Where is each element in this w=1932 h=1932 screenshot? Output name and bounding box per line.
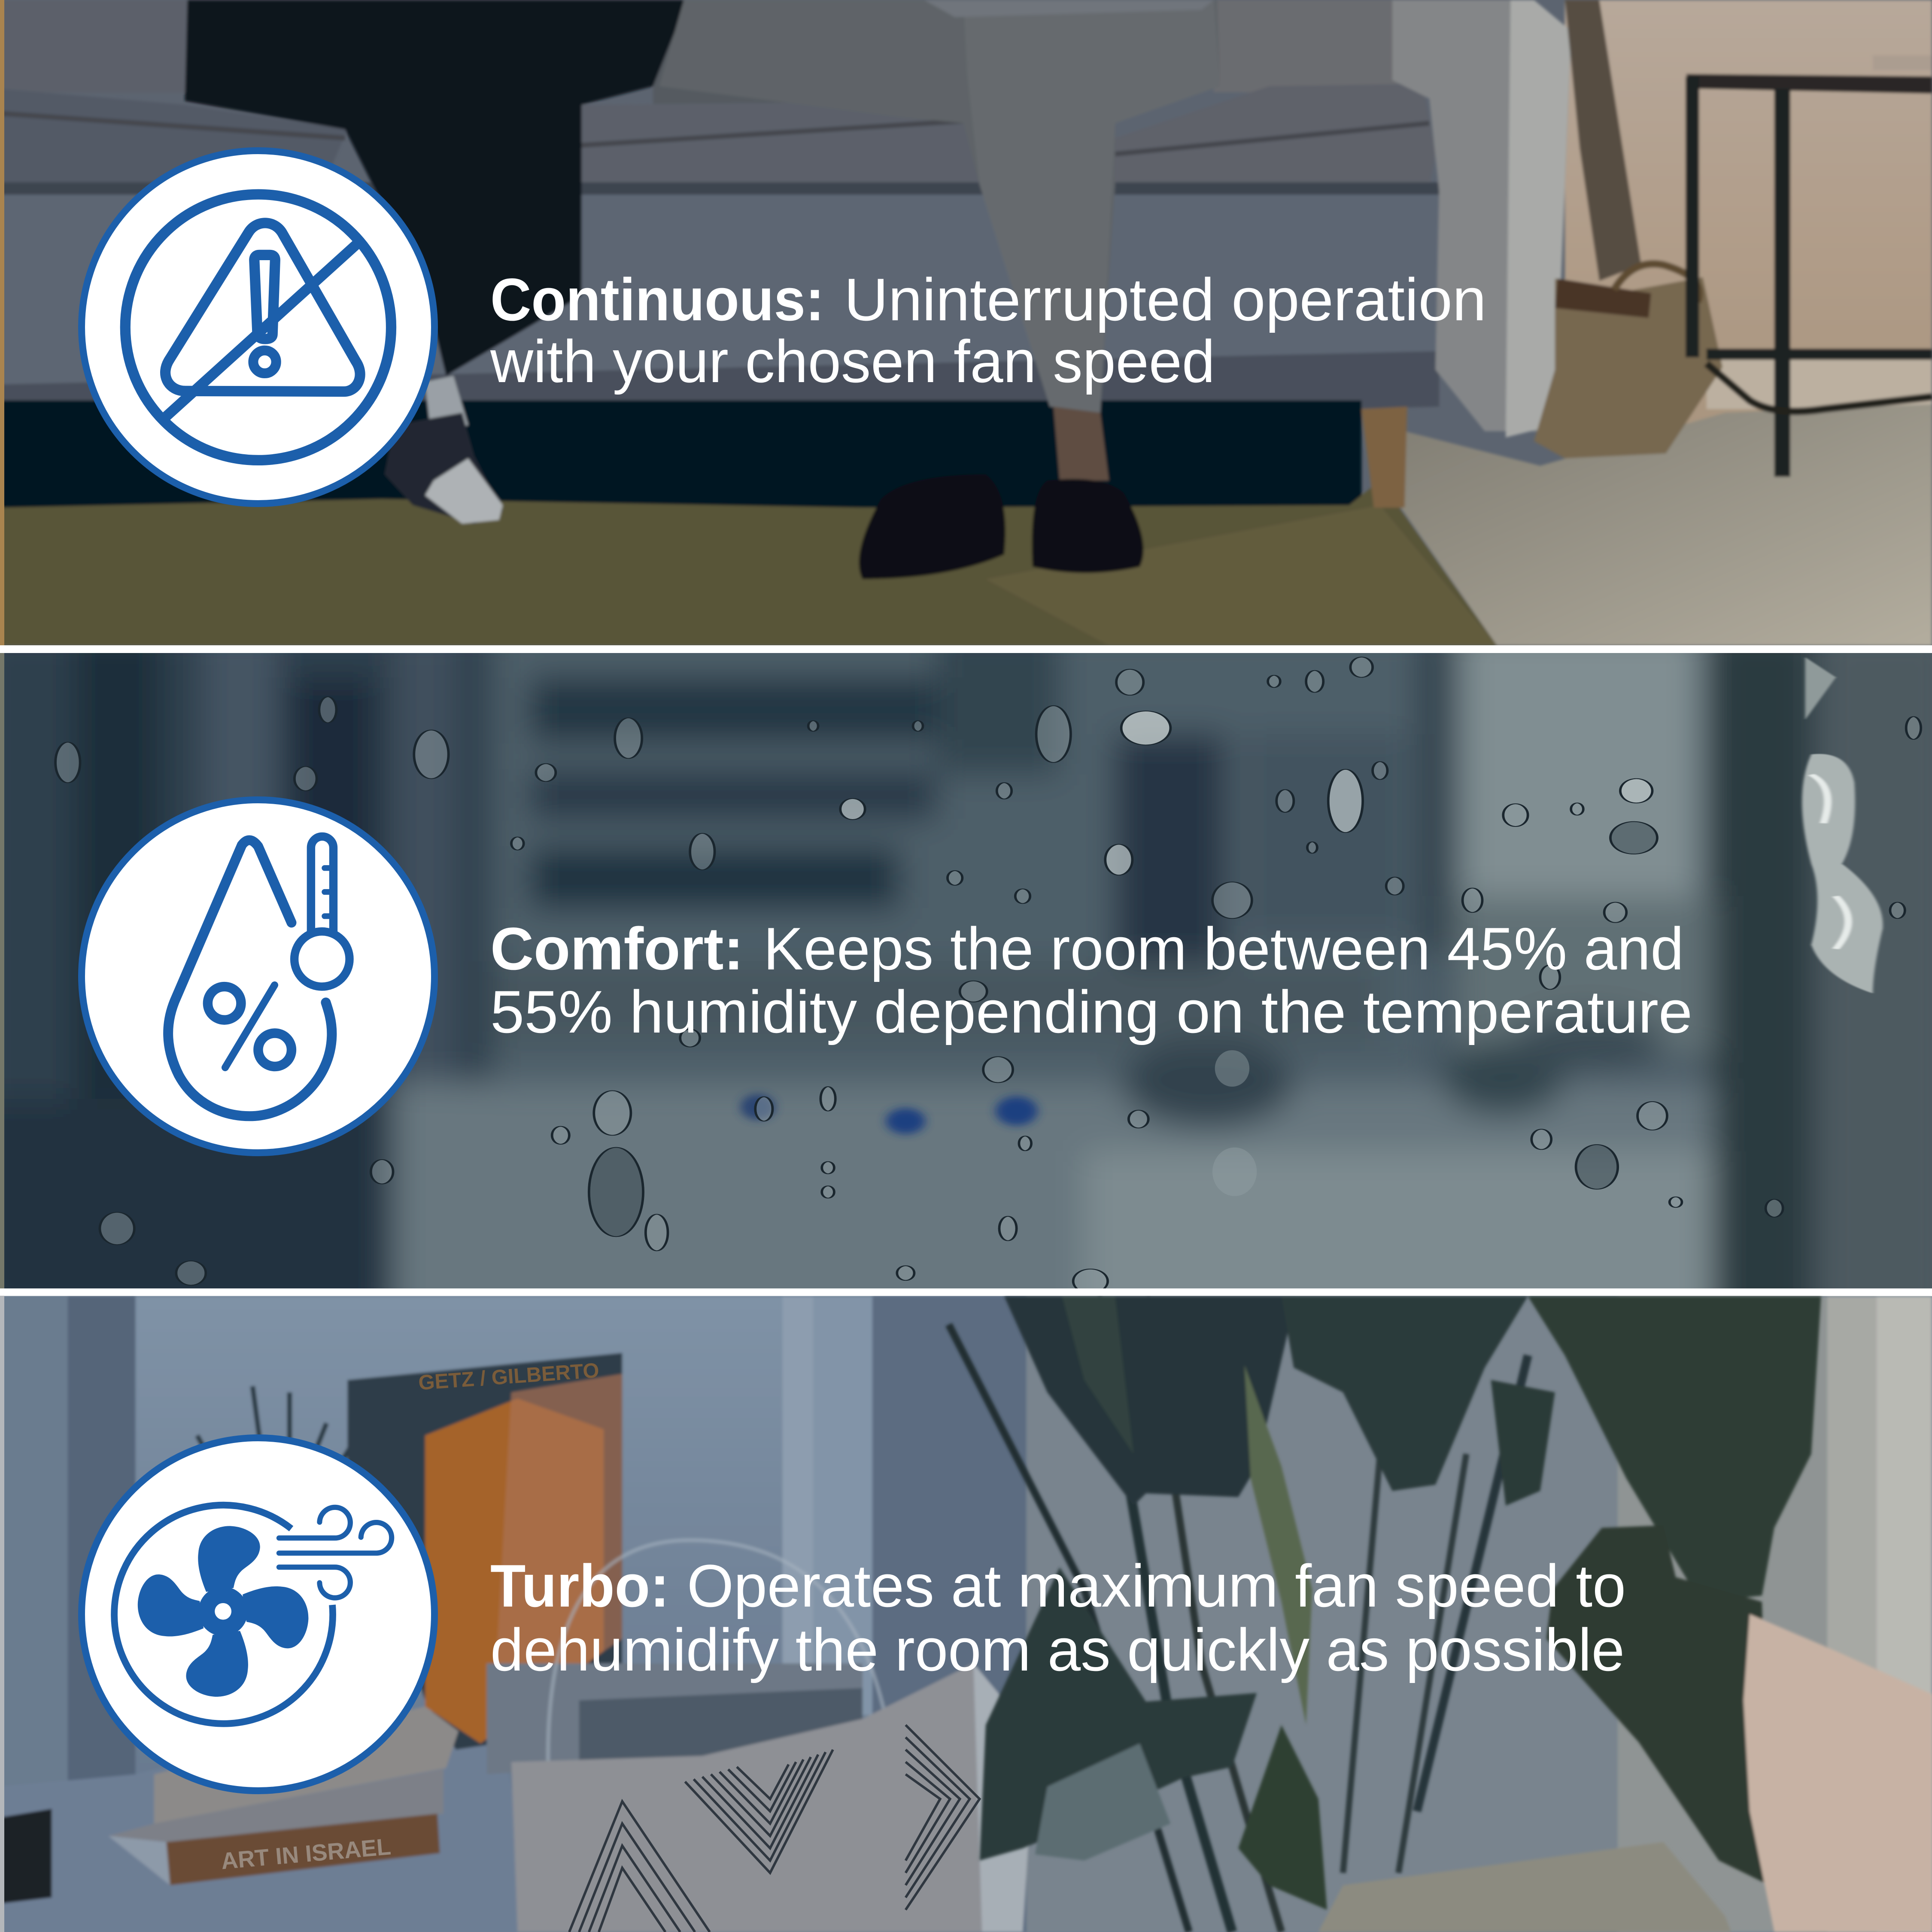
icon: fan with wind <box>82 1438 434 1791</box>
pillow chevrons <box>569 1725 980 1932</box>
text: continuous <box>490 266 1486 395</box>
icon: no warning triangle <box>82 151 434 504</box>
book title: ART IN ISRAEL <box>220 1833 392 1874</box>
photo: rain drops on window <box>0 629 1932 1326</box>
text: comfort <box>490 915 1692 1045</box>
left edge strip <box>0 653 4 1288</box>
text: turbo: Operates at maximum fan speed to <box>687 1552 1626 1619</box>
text: turbo: Turbo: <box>490 1552 669 1619</box>
bright splash <box>1802 657 1883 993</box>
text: turbo <box>490 1552 1626 1683</box>
text: comfort: 55% humidity depending on the temperature <box>490 978 1692 1045</box>
text: continuous: Uninterrupted operation <box>844 266 1486 333</box>
left edge strip <box>0 0 4 645</box>
water droplets <box>55 657 1921 1293</box>
text: continuous: Continuous: <box>490 266 824 333</box>
text: turbo: dehumidify the room as quickly as possible <box>490 1616 1625 1683</box>
record text: GETZ / GILBERTO <box>418 1359 600 1394</box>
text: comfort: Comfort: <box>490 915 744 982</box>
icon: humidity drop and thermometer <box>82 800 434 1153</box>
photo: window sill and plant <box>0 1296 1932 1932</box>
panel: continuous <box>0 0 1932 646</box>
left edge strip <box>0 1296 4 1932</box>
panel: comfort <box>0 629 1932 1326</box>
text: continuous: with your chosen fan speed <box>490 328 1215 395</box>
text: comfort: Keeps the room between 45% and <box>763 915 1684 982</box>
photo: living room sofa <box>0 0 1932 646</box>
panel: turbo <box>0 1296 1932 1932</box>
